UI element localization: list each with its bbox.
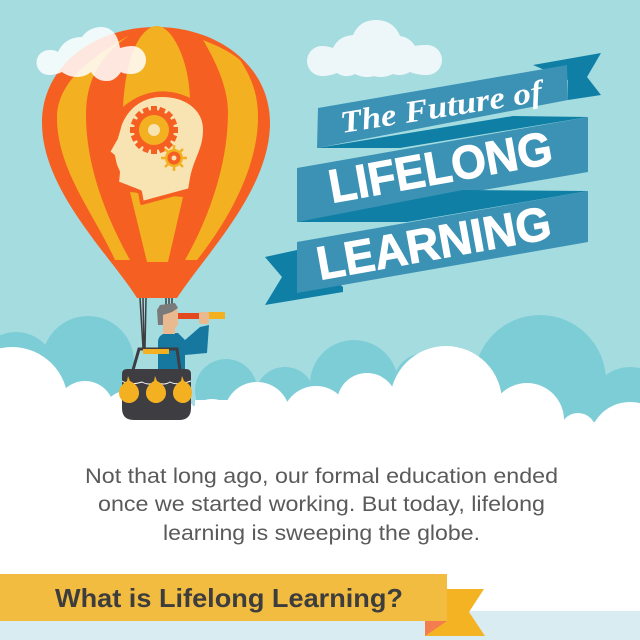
fold shadow two (297, 190, 588, 222)
heading: The Future of: The Future of (338, 73, 548, 140)
balloon envelope (42, 27, 270, 298)
lower centre yellow stripe (130, 192, 183, 262)
background clouds (0, 315, 640, 447)
bottom band (297, 191, 588, 293)
man head (163, 306, 178, 334)
man with telescope (157, 303, 225, 370)
small gear (161, 145, 187, 171)
man body (158, 325, 209, 370)
basket body (122, 369, 191, 420)
section heading ribbon (0, 574, 485, 636)
bottom ribbon tail (265, 250, 343, 305)
basket (119, 349, 192, 420)
telescope (178, 312, 225, 324)
basket handles (133, 349, 180, 370)
ribbon fold (425, 621, 447, 636)
right yellow stripe (185, 40, 258, 260)
basket trim (122, 381, 191, 384)
intro paragraph: learning is sweeping the globe. (163, 522, 480, 545)
ribbon band (0, 574, 447, 621)
heading: LIFELONG: LIFELONG (324, 121, 556, 213)
man hair (157, 303, 178, 325)
foreground white clouds (0, 346, 640, 640)
intro paragraph (85, 465, 558, 545)
yellow bar (143, 349, 169, 354)
right cloud (307, 20, 442, 77)
top band (317, 65, 568, 148)
middle band (297, 117, 588, 222)
top centre yellow stripe (123, 26, 190, 107)
intro paragraph: Not that long ago, our formal education ended (85, 465, 558, 488)
ribbon tail (425, 589, 485, 636)
intro paragraph: once we started working. But today, lifelong (98, 493, 545, 516)
section heading text: What is Lifelong Learning? (55, 583, 403, 613)
hot air balloon (42, 26, 270, 298)
left yellow stripe (57, 35, 130, 260)
head silhouette (108, 95, 205, 203)
balloon ropes (140, 298, 172, 348)
lower pale blue band (0, 611, 640, 640)
heading: LEARNING: LEARNING (312, 196, 555, 290)
top ribbon tail (533, 53, 601, 100)
fold shadow one (317, 116, 588, 148)
title banner (265, 53, 601, 305)
large gear (130, 106, 178, 154)
cloud over balloon (36, 27, 146, 81)
sandbags (119, 376, 192, 403)
